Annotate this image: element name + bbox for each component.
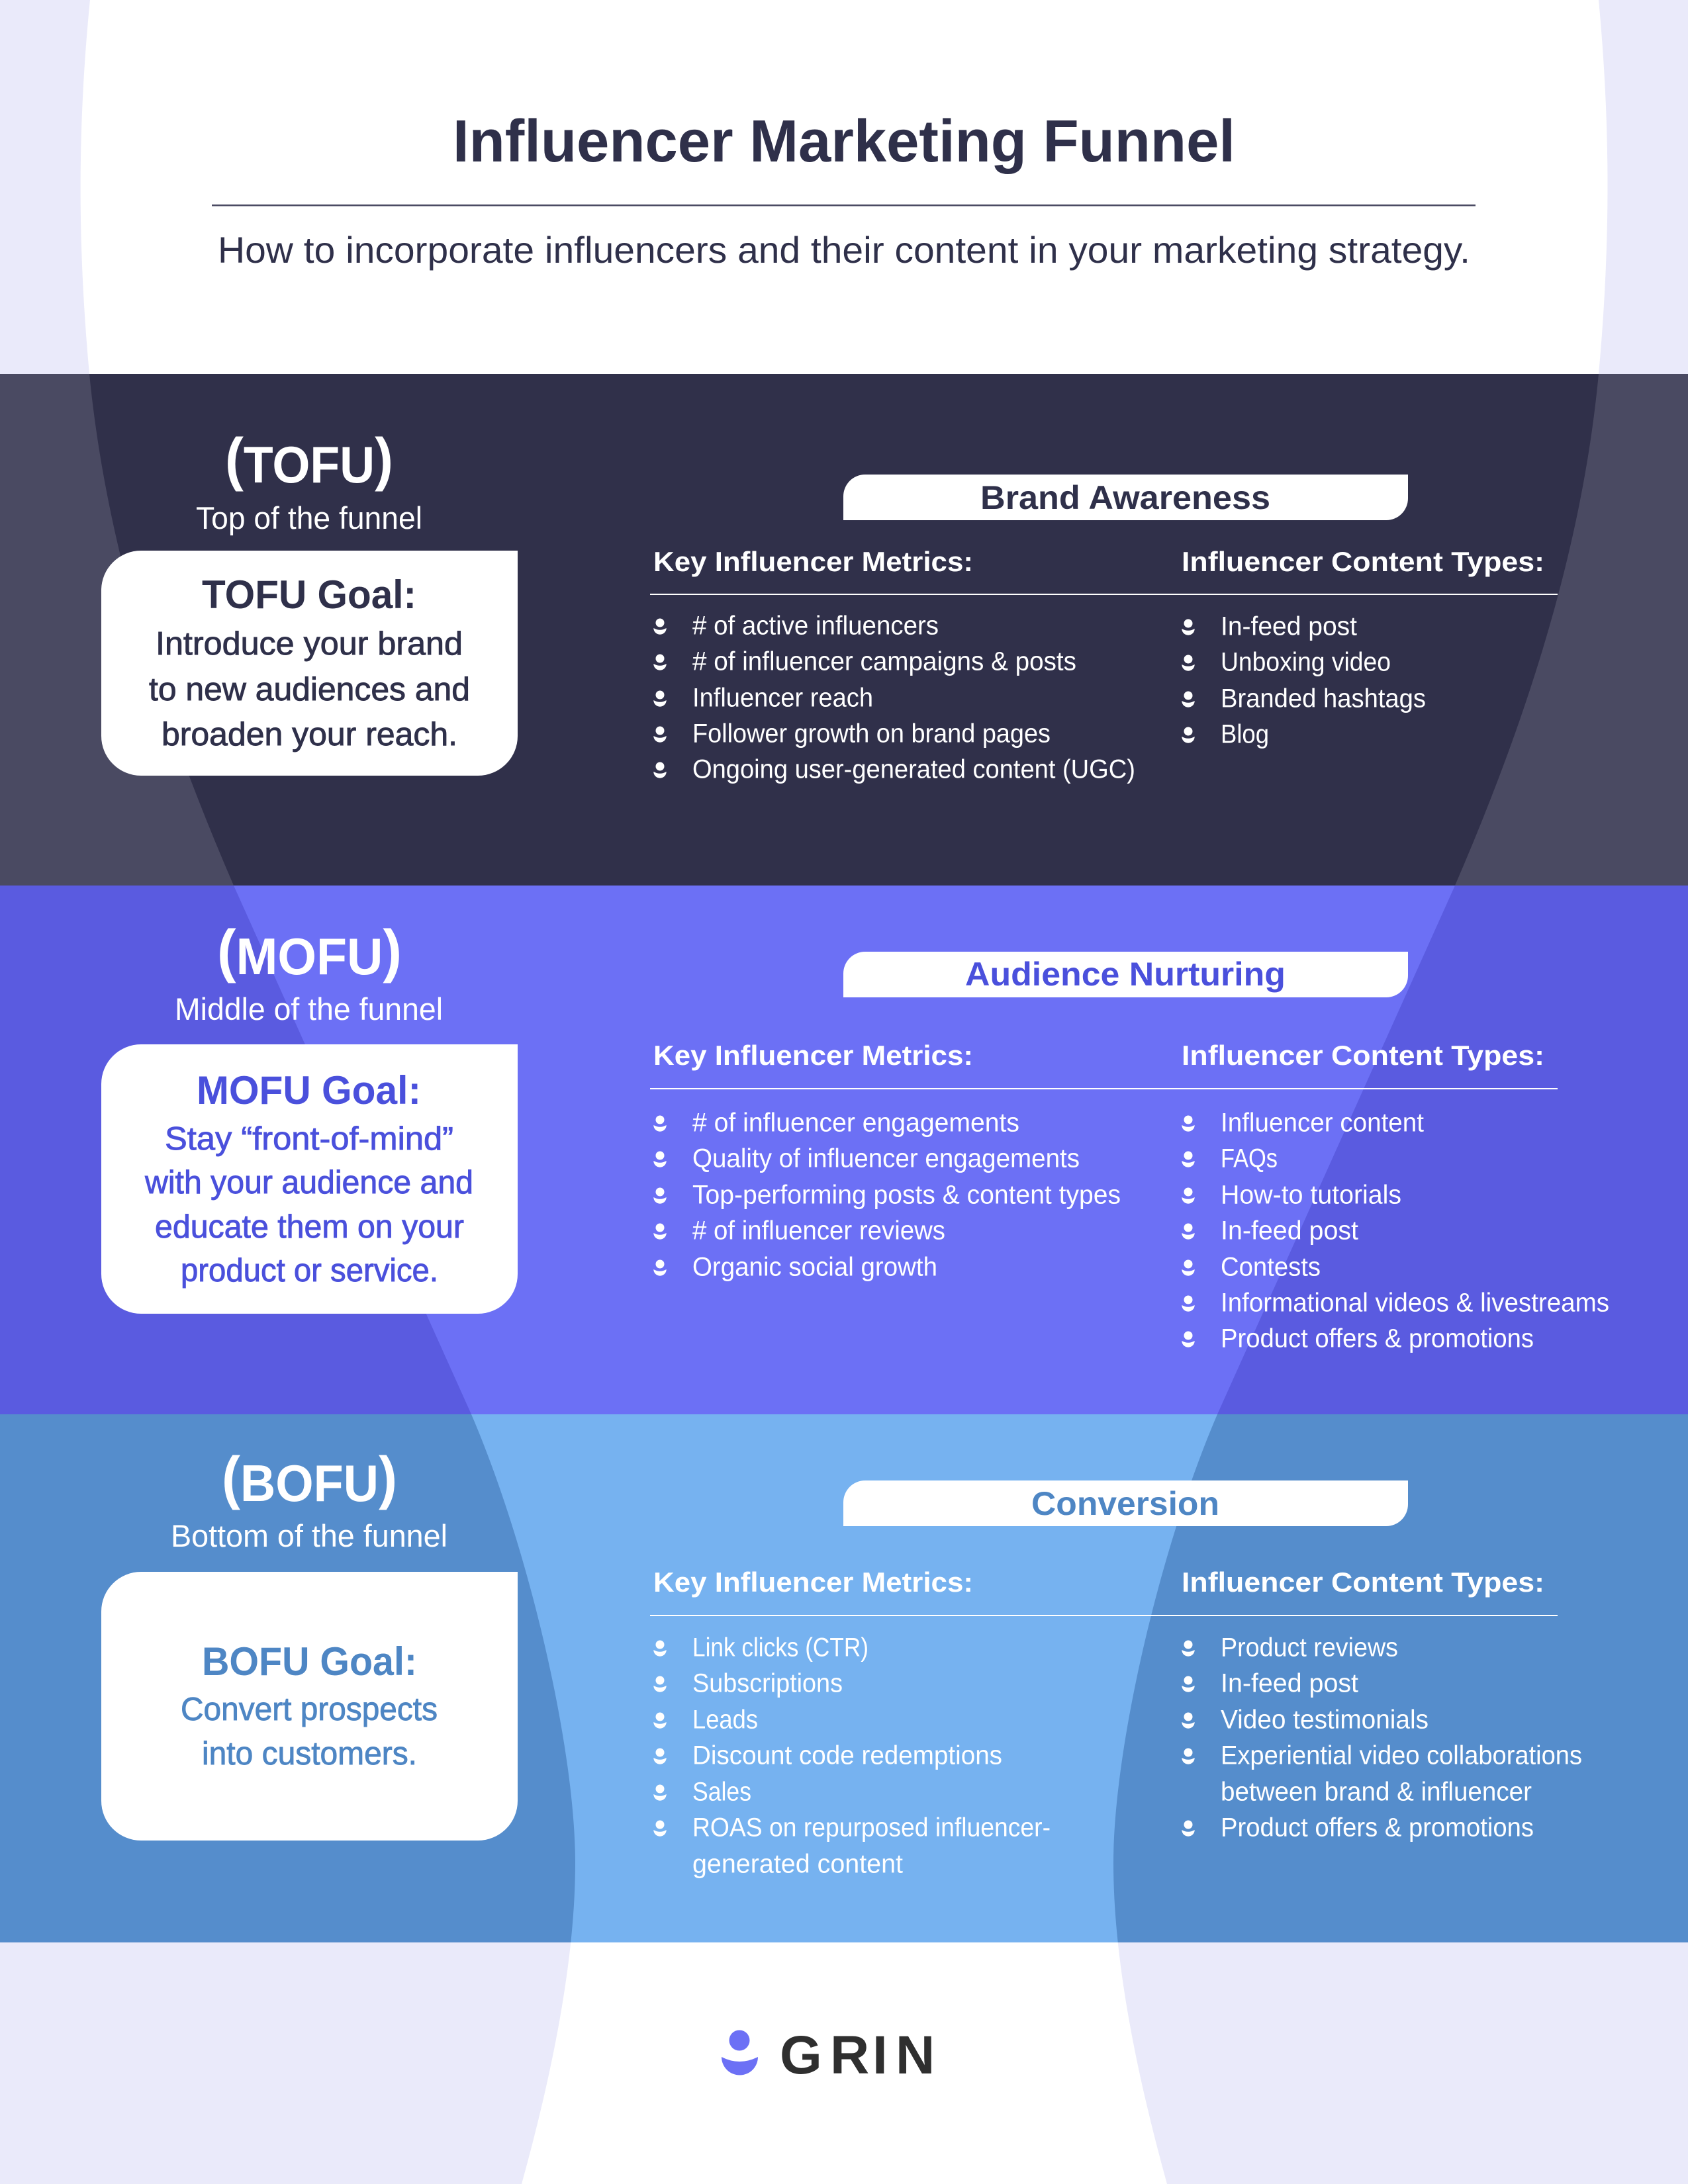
list: MOFU content types: FAQs bbox=[1221, 1144, 1278, 1173]
list: MOFU content types: Contests bbox=[1221, 1252, 1321, 1281]
list: TOFU content types bbox=[1182, 612, 1426, 749]
list: TOFU metrics: # of active influencers bbox=[692, 612, 939, 641]
list: TOFU metrics bbox=[653, 612, 1135, 784]
list: MOFU content types: Influencer content bbox=[1221, 1108, 1424, 1137]
heading: content types: Influencer Content Types: bbox=[1182, 1567, 1544, 1598]
caption: top of the funnel: Top of the funnel bbox=[196, 500, 422, 535]
band: TOFU background bbox=[0, 374, 1688, 886]
list: MOFU content types bbox=[1182, 1108, 1609, 1353]
section rule bbox=[650, 594, 1558, 595]
caption: middle of the funnel: Middle of the funnel bbox=[175, 991, 443, 1026]
band: MOFU background bbox=[0, 886, 1688, 1414]
stage tab: Brand Awareness: Brand Awareness bbox=[980, 479, 1270, 516]
list: BOFU metrics: Subscriptions bbox=[692, 1669, 843, 1698]
list: TOFU metrics: # of influencer campaigns & posts bbox=[692, 647, 1076, 676]
band: BOFU background bbox=[0, 1414, 1688, 1942]
goal card: MOFU: MOFU Goal: bbox=[197, 1068, 421, 1113]
goal card: MOFU: product or service. bbox=[181, 1253, 438, 1289]
goal card: TOFU: TOFU Goal: bbox=[202, 572, 416, 617]
list: BOFU metrics: Sales bbox=[692, 1778, 751, 1807]
goal card: TOFU bbox=[101, 551, 518, 776]
goal card: BOFU: BOFU Goal: bbox=[202, 1639, 417, 1684]
goal card: BOFU: into customers. bbox=[202, 1736, 417, 1772]
tag: MOFU: MOFU bbox=[236, 927, 383, 985]
list: BOFU content types: Product offers & promotions bbox=[1221, 1813, 1534, 1843]
list: BOFU content types: Product reviews bbox=[1221, 1633, 1398, 1662]
goal card: MOFU: with your audience and bbox=[144, 1165, 473, 1201]
goal card: TOFU: Introduce your brand bbox=[156, 626, 463, 662]
goal card: BOFU bbox=[101, 1572, 518, 1841]
list: MOFU content types: Informational videos & livestreams bbox=[1221, 1288, 1609, 1317]
stage tab: Conversion bbox=[843, 1480, 1408, 1526]
section rule bbox=[650, 1615, 1558, 1616]
title rule bbox=[212, 205, 1476, 206]
heading: content types: Influencer Content Types: bbox=[1182, 546, 1544, 577]
tag: MOFU: ( bbox=[217, 917, 236, 983]
goal card: TOFU: broaden your reach. bbox=[162, 717, 457, 752]
list: BOFU content types bbox=[1182, 1633, 1582, 1843]
list: BOFU content types: Video testimonials bbox=[1221, 1705, 1429, 1734]
list: BOFU content types: In-feed post bbox=[1221, 1669, 1358, 1698]
list: BOFU content types: between brand & influencer bbox=[1221, 1778, 1532, 1807]
tag: BOFU: BOFU bbox=[240, 1454, 379, 1512]
list: MOFU metrics: Top-performing posts & content types bbox=[692, 1181, 1121, 1210]
panel: TOFU bbox=[101, 426, 1558, 784]
tag: BOFU: ( bbox=[222, 1444, 240, 1510]
list: MOFU content types: How-to tutorials bbox=[1221, 1181, 1401, 1210]
list: BOFU metrics: ROAS on repurposed influencer- bbox=[692, 1813, 1051, 1843]
list: MOFU metrics: # of influencer reviews bbox=[692, 1216, 945, 1246]
goal card: BOFU: Convert prospects bbox=[181, 1692, 438, 1727]
list: TOFU content types: Blog bbox=[1221, 720, 1269, 749]
list: TOFU content types: Branded hashtags bbox=[1221, 684, 1426, 713]
logo: GRIN bbox=[722, 2025, 935, 2085]
list: MOFU metrics bbox=[653, 1108, 1121, 1281]
tag: BOFU: ) bbox=[379, 1444, 397, 1510]
list: MOFU metrics: Quality of influencer engagements bbox=[692, 1144, 1080, 1173]
stage tab: Conversion: Conversion bbox=[1031, 1485, 1219, 1522]
list: MOFU metrics: Organic social growth bbox=[692, 1252, 937, 1281]
tag: MOFU: ) bbox=[383, 917, 402, 983]
list: MOFU metrics: # of influencer engagements bbox=[692, 1108, 1019, 1137]
tag: TOFU: TOFU bbox=[244, 435, 375, 494]
goal card: MOFU: Stay “front-of-mind” bbox=[165, 1121, 453, 1157]
stage tab: Brand Awareness bbox=[843, 475, 1408, 520]
tag: TOFU: ) bbox=[375, 426, 393, 492]
list: BOFU metrics: Discount code redemptions bbox=[692, 1741, 1002, 1770]
title: Influencer Marketing Funnel bbox=[453, 109, 1235, 175]
heading: metrics: Key Influencer Metrics: bbox=[653, 1567, 973, 1598]
list: TOFU metrics: Follower growth on brand pages bbox=[692, 719, 1051, 748]
list: TOFU metrics: Ongoing user-generated content (UGC) bbox=[692, 754, 1135, 784]
list: TOFU content types: In-feed post bbox=[1221, 612, 1357, 641]
heading: metrics: Key Influencer Metrics: bbox=[653, 546, 973, 577]
icon: GRIN smile mark bbox=[722, 2030, 758, 2075]
list: MOFU content types: Product offers & promotions bbox=[1221, 1324, 1534, 1353]
caption: bottom of the funnel: Bottom of the funnel bbox=[171, 1518, 447, 1553]
goal card: TOFU: to new audiences and bbox=[149, 672, 470, 707]
panel: BOFU bbox=[101, 1444, 1582, 1878]
stage tab: Audience Nurturing bbox=[843, 952, 1408, 997]
list: BOFU metrics bbox=[653, 1633, 1051, 1878]
tag: TOFU: ( bbox=[225, 426, 244, 492]
list: TOFU content types: Unboxing video bbox=[1221, 647, 1391, 676]
subtitle: How to incorporate influencers and their content in your marketing strategy. bbox=[218, 229, 1470, 271]
list: BOFU content types: Experiential video collaborations bbox=[1221, 1741, 1582, 1770]
list: BOFU metrics: Leads bbox=[692, 1705, 758, 1734]
goal card: MOFU bbox=[101, 1044, 518, 1314]
heading: content types: Influencer Content Types: bbox=[1182, 1040, 1544, 1071]
list: BOFU metrics: generated content bbox=[692, 1849, 903, 1878]
goal card: MOFU: educate them on your bbox=[155, 1209, 464, 1245]
list: BOFU metrics: Link clicks (CTR) bbox=[692, 1633, 868, 1662]
heading: metrics: Key Influencer Metrics: bbox=[653, 1040, 973, 1071]
list: MOFU content types: In-feed post bbox=[1221, 1216, 1358, 1246]
stage tab: Audience Nurturing: Audience Nurturing bbox=[965, 956, 1286, 993]
section rule bbox=[650, 1088, 1558, 1089]
list: TOFU metrics: Influencer reach bbox=[692, 683, 873, 712]
panel: MOFU bbox=[101, 917, 1609, 1353]
wordmark: GRIN bbox=[780, 2025, 935, 2085]
